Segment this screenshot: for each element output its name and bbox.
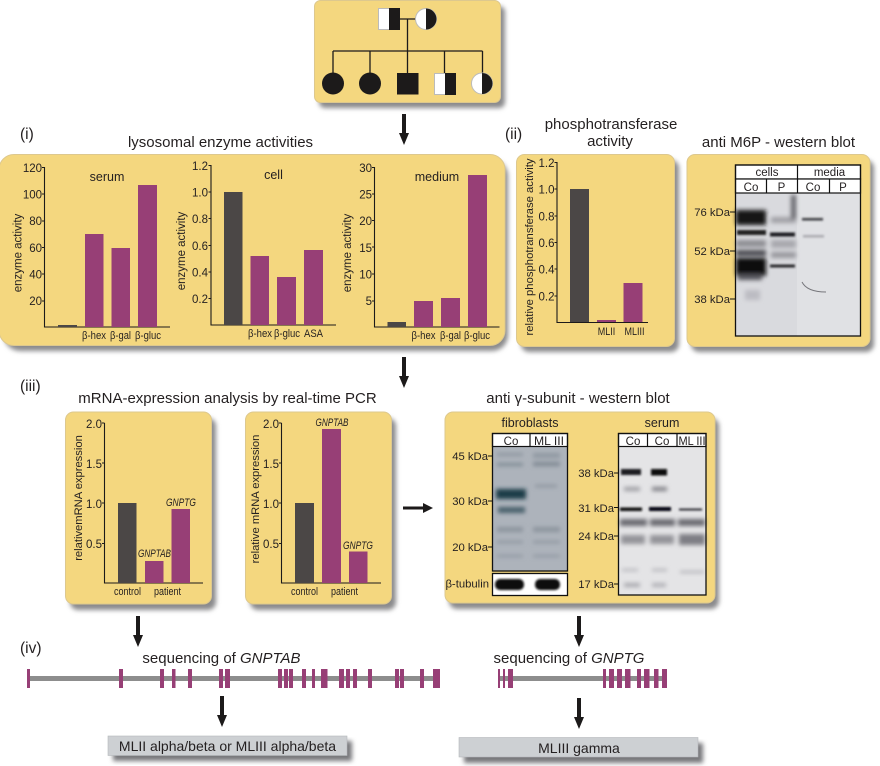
bar chart: cell: 0.6 (192, 241, 208, 253)
bar chart: expression 2 (250, 417, 381, 598)
heading: sequencing of GNPTG: sequencing of GNPTG (494, 650, 645, 667)
bar chart: cell: 0.2 (192, 294, 208, 306)
labels: molecular weights fibroblasts: 45 kDa (452, 451, 489, 463)
bar chart: serum: 80 (29, 216, 42, 228)
label: beta-tubulin: β-tubulin (445, 578, 489, 590)
gene diagram: GNPTG exons (498, 669, 667, 688)
bar chart: expression 2: relative mRNA expression (250, 435, 262, 563)
labels: molecular weights M6P: 76 kDa (694, 207, 731, 219)
bar chart: expression 2: 2.0 (263, 419, 279, 431)
box: MLIII gamma (459, 738, 703, 763)
bar chart: serum: 60 (29, 243, 42, 255)
bar chart: expression 1: patient (154, 586, 181, 598)
bar chart: serum: 20 (29, 296, 42, 308)
label: section iii: (iii) (20, 378, 41, 395)
bar chart: serum: 40 (29, 270, 42, 282)
heading: phosphotransferase activity: activity (587, 133, 633, 150)
panel: anti gamma-subunit western blot (445, 412, 719, 609)
bar chart: serum: enzyme activity (12, 213, 24, 292)
bar chart: expression 1: GNPTG (166, 497, 196, 509)
gene diagram: GNPTAB exons (27, 669, 440, 688)
arrow: chart to GNPTAB sequencing (133, 616, 143, 647)
blot: M6P: P (778, 182, 786, 194)
bar chart: phosphotransferase: 0.8 (538, 212, 554, 224)
bar chart: phosphotransferase: MLIII (624, 326, 644, 338)
icon: mother, half-filled circle (416, 8, 437, 30)
panel: lysosomal enzyme activities (0, 154, 508, 351)
box: MLII alpha/beta or MLIII alpha/beta: MLII alpha/beta or MLIII alpha/beta (119, 738, 336, 754)
bar chart: expression 2: control (291, 586, 318, 598)
panel: mRNA expression chart 2 (246, 412, 396, 610)
bar chart: expression 2: patient (331, 586, 358, 598)
bar chart: expression 1 (73, 419, 203, 598)
bar chart: serum: β-hex (82, 330, 106, 342)
blot: serum: Co (655, 436, 669, 448)
labels: molecular weights serum: 17 kDa (578, 579, 615, 591)
bar chart: phosphotransferase: 1.2 (538, 158, 554, 170)
labels: molecular weights serum: 24 kDa (578, 531, 615, 543)
bar chart: expression 2: 1.5 (263, 459, 279, 471)
bar chart: expression 1: control (114, 586, 141, 598)
bar chart: expression 1: GNPTAB (138, 548, 171, 560)
bar chart: serum (12, 163, 170, 342)
heading: serum: serum (645, 416, 679, 430)
labels: molecular weights serum (578, 468, 618, 591)
bar chart: medium: medium (415, 170, 459, 184)
bar chart: expression 1: 1.0 (86, 499, 102, 511)
blot: M6P: P (839, 182, 847, 194)
bar chart: cell: β-gluc (274, 328, 300, 340)
blot: beta-tubulin (492, 574, 568, 596)
blot: serum: ML III (678, 436, 706, 448)
bar chart: cell: 0.8 (192, 214, 208, 226)
bar chart: expression 2: GNPTG (343, 540, 373, 552)
bar chart: expression 1: 1.5 (86, 459, 102, 471)
icon: affected daughter (322, 72, 344, 94)
bar chart: expression 2: 1.0 (263, 499, 279, 511)
blot: fibroblasts: Co (504, 436, 518, 448)
bar chart: phosphotransferase: 0.4 (538, 264, 555, 276)
bar chart: cell: ASA (304, 328, 324, 340)
bar chart: medium: 15 (359, 243, 372, 255)
bar chart: cell: 1.2 (192, 161, 208, 173)
heading: anti M6P western blot: anti M6P - western blot (702, 134, 856, 151)
panel: mRNA expression chart 1 (66, 412, 216, 610)
labels: molecular weights M6P: 38 kDa (694, 294, 731, 306)
arrow: expression to gamma blot (403, 503, 433, 513)
arrow: GNPTAB to diagnosis (217, 696, 227, 727)
blot: M6P (735, 165, 861, 336)
bar chart: medium: 5 (366, 296, 372, 308)
labels: molecular weights fibroblasts (452, 451, 492, 554)
labels: molecular weights fibroblasts: 30 kDa (452, 496, 489, 508)
arrow: to section iii (399, 357, 409, 388)
bar chart: serum: 100 (23, 190, 42, 202)
bar chart: cell: 0.4 (192, 268, 209, 280)
box: MLIII gamma: MLIII gamma (538, 740, 620, 756)
bar chart: expression 2: 0.5 (263, 539, 279, 551)
labels: molecular weights serum: 31 kDa (578, 503, 615, 515)
bar chart: cell: 1.0 (192, 188, 208, 200)
label: section iv: (iv) (20, 640, 42, 657)
blot: M6P: media (814, 167, 846, 179)
blot: fibroblasts: ML III (534, 436, 564, 448)
bar chart: medium: 30 (359, 163, 372, 175)
bar chart: serum: 120 (23, 163, 42, 175)
panel: phosphotransferase activity (516, 154, 679, 352)
bar chart: medium: enzyme activity (342, 213, 354, 292)
bar chart: cell (176, 161, 336, 340)
bar chart: medium: β-gal (440, 330, 461, 342)
icon: father, half-filled square (378, 8, 400, 30)
arrow: GNPTG to diagnosis (574, 698, 584, 729)
heading: anti gamma-subunit western blot: anti γ-subunit - western blot (486, 390, 671, 407)
bar chart: expression 2: GNPTAB (316, 417, 348, 429)
blot: fibroblasts (492, 434, 568, 571)
labels: molecular weights fibroblasts: 20 kDa (452, 542, 489, 554)
bar chart: medium: 25 (359, 190, 372, 202)
bar chart: serum: β-gal (110, 330, 131, 342)
bar chart: cell: cell (264, 168, 283, 182)
blot: M6P: cells (755, 167, 779, 179)
icon: affected daughter (359, 72, 381, 94)
bar chart: medium (342, 163, 500, 342)
bar chart: serum: β-gluc (135, 330, 161, 342)
heading: sequencing of GNPTAB: sequencing of GNPTAB (142, 650, 301, 667)
icon: affected son (397, 73, 418, 94)
bar chart: cell: β-hex (248, 328, 272, 340)
box: MLII alpha/beta or MLIII alpha/beta (108, 736, 352, 761)
blot: serum: Co (626, 436, 640, 448)
bar chart: cell: enzyme activity (176, 211, 188, 290)
bar chart: medium: β-hex (412, 330, 436, 342)
icon: carrier son (434, 73, 456, 95)
panel: anti M6P western blot (687, 154, 874, 352)
labels: molecular weights M6P (694, 207, 735, 306)
bar chart: phosphotransferase: MLII (598, 326, 615, 338)
bar chart: medium: 10 (359, 270, 372, 282)
bar chart: phosphotransferase: relative phosphotransferase activity (524, 158, 536, 336)
label: section ii: (ii) (505, 126, 522, 143)
heading: fibroblasts: fibroblasts (502, 416, 558, 430)
heading: phosphotransferase activity: phosphotransferase (545, 116, 677, 133)
blot: serum (618, 434, 706, 595)
arrow: pedigree to enzyme activities (399, 114, 409, 145)
label: section i: (i) (20, 126, 34, 143)
bar chart: phosphotransferase (524, 158, 648, 338)
heading: lysosomal enzyme activities: lysosomal enzyme activities (128, 134, 313, 151)
bar chart: medium: 20 (359, 216, 372, 228)
bar chart: phosphotransferase: 1.0 (538, 184, 554, 196)
bar chart: phosphotransferase: 0.2 (538, 292, 554, 304)
bar chart: medium: β-gluc (464, 330, 490, 342)
blot: M6P: Co (744, 182, 758, 194)
icon: carrier daughter (472, 73, 492, 94)
labels: molecular weights serum: 38 kDa (578, 468, 615, 480)
bar chart: expression 1: 0.5 (86, 539, 102, 551)
heading: mRNA expression analysis: mRNA-expression analysis by real-time PCR (78, 390, 377, 407)
labels: molecular weights M6P: 52 kDa (694, 246, 731, 258)
bar chart: expression 1: 2.0 (86, 419, 102, 431)
bar chart: serum: serum (90, 170, 124, 184)
blot: M6P: Co (806, 182, 820, 194)
bar chart: phosphotransferase: 0.6 (538, 238, 554, 250)
arrow: blot to GNPTG sequencing (574, 616, 584, 647)
panel: family pedigree (314, 0, 505, 108)
bar chart: expression 1: relativemRNA expression (73, 435, 85, 561)
